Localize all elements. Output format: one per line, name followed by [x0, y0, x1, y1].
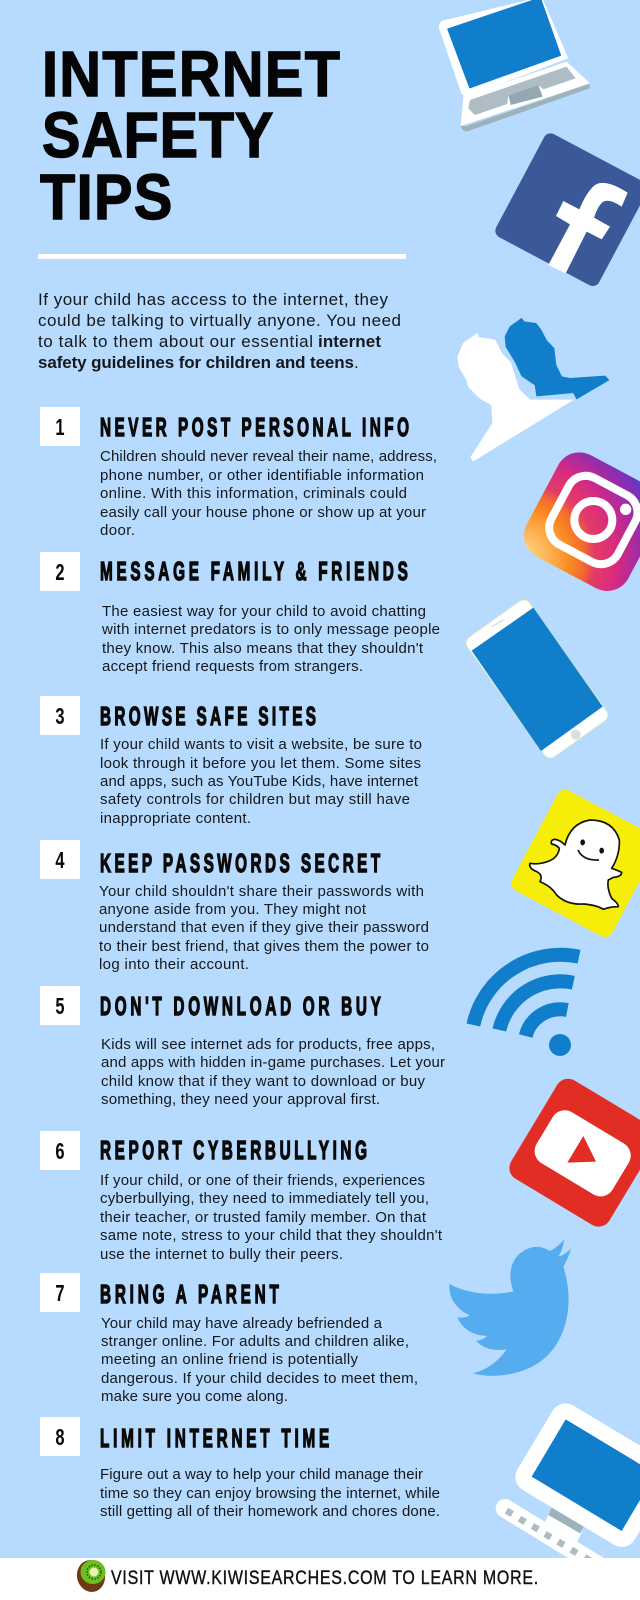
icon: facebook [493, 131, 640, 289]
tip 6 [40, 1131, 443, 1263]
tip 4: 4 [55, 848, 65, 874]
intro text: internet [318, 332, 381, 351]
icon: kiwi [74, 1557, 108, 1595]
intro text: If your child has access to the internet, they [38, 290, 388, 309]
intro text: . [354, 353, 359, 372]
tip 3: look through it before you let them. Some sites [100, 755, 421, 772]
intro text: could be talking to virtually anyone. You need [38, 311, 401, 330]
tip 1: phone number, or other identifiable information [100, 467, 424, 484]
intro text [38, 290, 401, 372]
tip 5: and apps with hidden in-game purchases. Let your [101, 1054, 445, 1071]
title: INTERNET [42, 38, 340, 110]
tip 2: The easiest way for your child to avoid chatting [102, 603, 426, 620]
icon: youtube [505, 1074, 640, 1231]
icon: desktop computer [505, 1398, 640, 1571]
tip 8: LIMIT INTERNET TIME [100, 1425, 329, 1453]
tip 2: 2 [55, 560, 65, 586]
intro text: to talk to them about our essential [38, 332, 313, 351]
icon: wifi [473, 955, 579, 1056]
icon: snapchat [508, 787, 640, 940]
tip 2: MESSAGE FAMILY & FRIENDS [100, 558, 408, 586]
tip 6: use the internet to bully their peers. [100, 1246, 343, 1263]
icon: laptop [439, 0, 590, 132]
tip 3: If your child wants to visit a website, be sure to [100, 736, 422, 753]
tip 5: something, they need your approval first. [101, 1091, 380, 1108]
tip 2: with internet predators is to only message people [101, 621, 440, 638]
title: SAFETY [42, 99, 273, 171]
tip 3: 3 [55, 704, 65, 730]
footer text: VISIT WWW.KIWISEARCHES.COM TO LEARN MORE. [111, 1567, 538, 1588]
tip 7: meeting an online friend is potentially [101, 1351, 358, 1368]
tip 8: Figure out a way to help your child manage their [100, 1466, 423, 1483]
tip 3: BROWSE SAFE SITES [100, 703, 316, 731]
title [40, 38, 340, 233]
tip 4: log into their account. [99, 956, 249, 973]
title: TIPS [40, 161, 172, 233]
tip 7: 7 [55, 1281, 65, 1307]
tip 1: 1 [55, 415, 65, 441]
tip 7: Your child may have already befriended a [101, 1315, 383, 1332]
tip 4 [40, 840, 429, 973]
tip 2: they know. This also means that they shouldn't [102, 640, 424, 657]
tip 7: dangerous. If your child decides to meet them, [101, 1370, 418, 1387]
tip 1: NEVER POST PERSONAL INFO [100, 414, 409, 442]
icon: twitter [449, 1239, 571, 1376]
tip 5: child know that if they want to download or buy [101, 1073, 426, 1090]
tip 6: cyberbullying, they need to immediately tell you, [100, 1190, 429, 1207]
tip 8: 8 [55, 1425, 65, 1451]
tip 6: REPORT CYBERBULLYING [100, 1137, 367, 1165]
tip 2: accept friend requests from strangers. [102, 658, 363, 675]
tip 1: online. With this information, criminals could [100, 485, 407, 502]
tip 6: If your child, or one of their friends, experiences [100, 1172, 425, 1189]
tip 5: Kids will see internet ads for products, free apps, [101, 1036, 435, 1053]
tip 1: door. [100, 522, 135, 539]
icon: people silhouettes [458, 318, 609, 461]
tip 8 [40, 1417, 440, 1520]
tip 4: anyone aside from you. They might not [99, 901, 367, 918]
footer bar [0, 1557, 640, 1600]
tip 8: time so they can enjoy browsing the internet, while [100, 1485, 440, 1502]
tip 5: 5 [55, 994, 65, 1020]
tip 4: understand that even if they give their password [99, 919, 429, 936]
tip 3: and apps, such as YouTube Kids, have internet [100, 773, 419, 790]
tip 3 [40, 696, 422, 827]
tip 8: still getting all of their homework and chores done. [100, 1503, 440, 1520]
tip 7: stranger online. For adults and children alike, [101, 1333, 409, 1350]
tip 3: inappropriate content. [100, 810, 251, 827]
tip 5: DON'T DOWNLOAD OR BUY [100, 993, 381, 1021]
tip 6: their teacher, or trusted family member. On that [100, 1209, 427, 1226]
tip 1 [40, 407, 437, 539]
tip 5 [40, 986, 445, 1108]
tip 7: make sure you come along. [101, 1388, 288, 1405]
tip 1: easily call your house phone or show up at your [100, 504, 426, 521]
tip 3: safety controls for children but may still have [100, 791, 410, 808]
tip 6: same note, stress to your child that they shouldn't [100, 1227, 443, 1244]
tip 7: BRING A PARENT [100, 1281, 279, 1309]
tip 4: to their best friend, that gives them the power to [99, 938, 429, 955]
tip 4: Your child shouldn't share their passwords with [99, 883, 424, 900]
tip 4: KEEP PASSWORDS SECRET [100, 850, 380, 878]
icon: smartphone [463, 597, 611, 761]
intro text: safety guidelines for children and teens [38, 353, 354, 372]
tip 7 [40, 1273, 418, 1405]
tip 2 [40, 552, 440, 675]
tip 6: 6 [55, 1139, 65, 1165]
tip 1: Children should never reveal their name, address, [100, 448, 437, 465]
icon: instagram [516, 444, 640, 599]
